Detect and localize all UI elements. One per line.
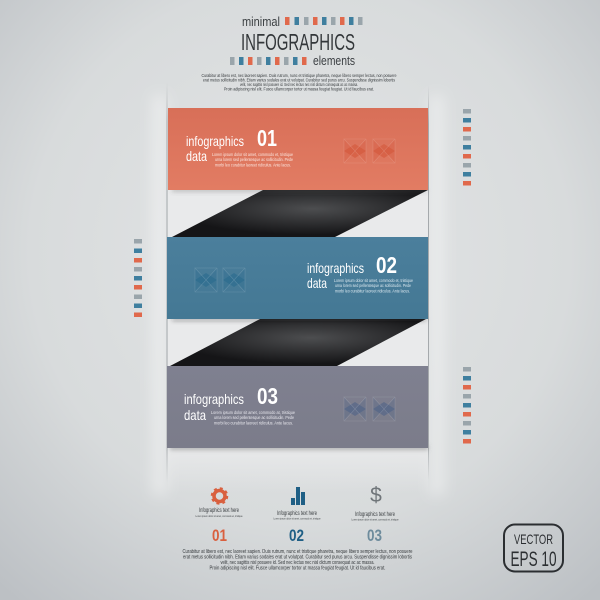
- footer paragraph: velit, nec sagittis nisl posuere id. Sed nec lectus nec nisl dictum consequat ac ac massa.: [220, 560, 374, 566]
- column 03: [352, 484, 399, 545]
- footer paragraph: Proin adipiscing nisl elit. Fusce ullamcorper tortor ut massa feugiat feugiat. Ut id faucibus erat.: [210, 566, 386, 572]
- caption: Lorem ipsum dolor sit amet, commodo et, tristique: [352, 518, 399, 522]
- vector badge: [504, 524, 563, 572]
- body text: morbi leo curabitur laoreet ridiculus. Ante lacus.: [215, 162, 291, 168]
- body text: urna lorem sed pellentesque ac sollicitudin. Pede: [215, 157, 293, 162]
- panel 01: orange: data: [186, 148, 207, 164]
- body text: Lorem ipsum dolor sit amet, commodo et, tristique: [334, 278, 413, 283]
- heading: INFOGRAPHICS: INFOGRAPHICS: [241, 29, 355, 55]
- panel 02: blue: [167, 237, 428, 321]
- intro paragraph: Curabitur at libero est, nec laoreet sapien. Duis rutrum, nunc et tristique pharetra, neque libero semper lectus, non posuere: [202, 73, 397, 78]
- intro paragraph: Proin adipiscing nisl elit. Fusce ullamcorper tortor ut massa feugiat feugiat. Ut id faucibus erat.: [224, 86, 374, 92]
- caption: Lorem ipsum dolor sit amet, commodo et, tristique: [196, 514, 243, 518]
- column 01: [196, 488, 243, 545]
- panel 03: grey: [167, 366, 428, 450]
- label: Infographics text here: [199, 508, 239, 514]
- label: Infographics text here: [355, 512, 395, 518]
- caption: Lorem ipsum dolor sit amet, commodo et, tristique: [274, 516, 321, 520]
- label: infographics: [186, 133, 244, 149]
- number: 01: [212, 526, 227, 545]
- body text: [212, 152, 293, 168]
- icon: gear: [212, 488, 227, 504]
- vector badge: VECTOR: [514, 531, 553, 547]
- number: 03: [257, 383, 278, 409]
- icons: bowties: [344, 139, 395, 163]
- label: infographics: [184, 391, 244, 407]
- column 02: [274, 487, 321, 545]
- body text: urna lorem sed pellentesque ac sollicitudin. Pede: [335, 283, 411, 288]
- body text: morbi leo curabitur laoreet ridiculus. Ante lacus.: [335, 288, 410, 294]
- panel 03: grey: data: [184, 407, 206, 423]
- intro paragraph: [202, 73, 397, 92]
- heading: minimal: minimal: [242, 14, 280, 29]
- side glow strips: [152, 82, 444, 495]
- vector badge: EPS 10: [510, 548, 556, 571]
- body text: urna lorem sed pellentesque ac sollicitudin. Pede: [214, 415, 294, 420]
- squares row: bottom: [230, 57, 306, 65]
- panel 01: orange: [168, 108, 428, 192]
- label: infographics: [307, 260, 364, 276]
- body text: morbi leo curabitur laoreet ridiculus. Ante lacus.: [214, 420, 293, 426]
- dark diagonal ribbon 2: [170, 319, 426, 366]
- footer paragraph: Curabitur at libero est, nec laoreet sapien. Duis rutrum, nunc et tristique pharetra, neque libero semper lectus, non posuere: [182, 549, 413, 555]
- panel 02: blue: data: [307, 275, 327, 291]
- side squares: left: [134, 239, 142, 317]
- intro paragraph: velit, nec sagittis nisl posuere id. Sed nec lectus nec nisl dictum consequat ac ac massa.: [240, 82, 358, 87]
- heading: elements: elements: [313, 53, 355, 68]
- icons: bowties: [195, 268, 245, 292]
- intro paragraph: erat metus sollicitudin nibh. Etiam varius sodales erat ut volutpat. Curabitur sed purus arcu. Suspendisse dignissim lobortis: [203, 78, 395, 82]
- body text: [334, 278, 413, 294]
- body text: Lorem ipsum dolor sit amet, commodo at, tristique: [211, 410, 295, 415]
- title block: [202, 14, 397, 92]
- side squares: top right: [463, 109, 471, 186]
- body text: Lorem ipsum dolor sit amet, commodo et, tristique: [212, 152, 293, 157]
- number: 01: [257, 125, 277, 151]
- footer paragraph: [182, 549, 413, 572]
- label: Infographics text here: [277, 511, 317, 517]
- dark diagonal ribbon 1: [172, 190, 428, 237]
- number: 03: [367, 526, 382, 545]
- side squares: bottom right: [463, 367, 471, 444]
- icon: bar chart: [291, 487, 305, 505]
- icons: bowties: [344, 397, 395, 421]
- body text: [211, 410, 295, 426]
- number: 02: [376, 252, 397, 278]
- squares row: top: [285, 17, 362, 25]
- number: 02: [289, 526, 304, 545]
- footer paragraph: erat metus sollicitudin nibh. Etiam varius sodales erat ut volutpat. Curabitur sed purus arcu. Suspendisse dignissim lobortis: [183, 554, 412, 560]
- icon: dollar: $: [370, 484, 382, 507]
